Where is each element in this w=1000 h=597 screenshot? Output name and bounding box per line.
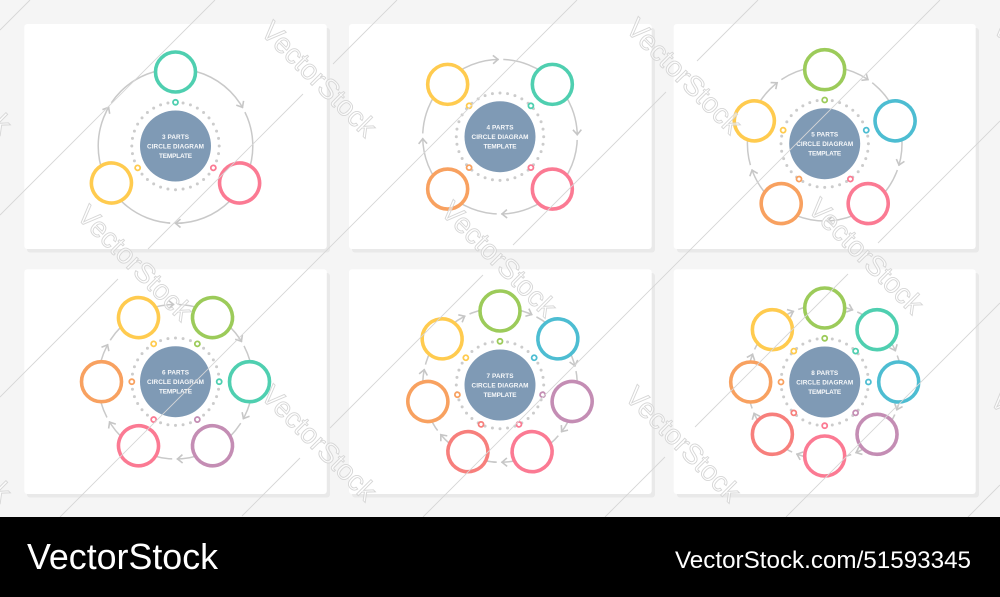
circle diagram: 5 parts: CIRCLE DIAGRAM: [796, 141, 853, 148]
panel: 4 parts: [349, 24, 655, 252]
watermarks: VectorStock: [802, 192, 930, 320]
circle diagram: 8 parts: 8 PARTS: [811, 370, 839, 377]
footer band: [0, 517, 1000, 597]
circle diagram: 3 parts: CIRCLE DIAGRAM: [147, 143, 204, 150]
watermarks: VectorStock: [620, 12, 748, 140]
circle diagram: 4 parts: TEMPLATE: [484, 144, 517, 151]
circle diagram: 7 parts: 7 PARTS: [486, 373, 514, 380]
circle diagram: 7 parts: TEMPLATE: [484, 392, 517, 399]
circle diagram: 4 parts: CIRCLE DIAGRAM: [472, 134, 528, 141]
circle diagram: 6 parts: CIRCLE DIAGRAM: [147, 379, 204, 386]
circle diagram: 4 parts: [419, 55, 581, 218]
circle diagram: 6 parts: [82, 290, 270, 473]
footer logo text: VectorStock: [27, 536, 219, 577]
circle diagram: 6 parts: TEMPLATE: [159, 389, 193, 396]
circle diagram: 5 parts: 5 PARTS: [811, 131, 839, 138]
panel: 5 parts: [674, 24, 979, 252]
watermarks: VectorStock: [71, 199, 199, 327]
circle diagram: 7 parts: CIRCLE DIAGRAM: [472, 382, 528, 389]
circle diagram: 5 parts: TEMPLATE: [808, 151, 842, 158]
panel: 7 parts: [349, 269, 655, 498]
panel: 3 parts: [24, 24, 330, 252]
watermarks: VectorStock: [255, 15, 383, 143]
circle diagram: 6 parts: 6 PARTS: [162, 370, 190, 377]
panel: 8 parts: [674, 269, 979, 498]
circle diagram: 3 parts: [84, 52, 267, 228]
circle diagram: 3 parts: TEMPLATE: [159, 153, 193, 160]
footer image id: VectorStock.com/51593345: [675, 547, 971, 574]
circle diagram: 8 parts: TEMPLATE: [808, 389, 842, 396]
circle diagram: 7 parts: [404, 291, 596, 478]
watermarks: VectorStock: [255, 379, 383, 507]
circle diagram: 8 parts: CIRCLE DIAGRAM: [796, 379, 853, 386]
circle diagram: 5 parts: [729, 50, 920, 232]
circle diagram: 4 parts: 4 PARTS: [486, 124, 514, 131]
circle diagram: 3 parts: 3 PARTS: [162, 134, 190, 141]
panel: 6 parts: [24, 269, 330, 498]
watermarks: VectorStock: [619, 380, 747, 508]
circle diagram: 8 parts: [731, 288, 919, 476]
watermarks: VectorStock: [435, 195, 563, 323]
